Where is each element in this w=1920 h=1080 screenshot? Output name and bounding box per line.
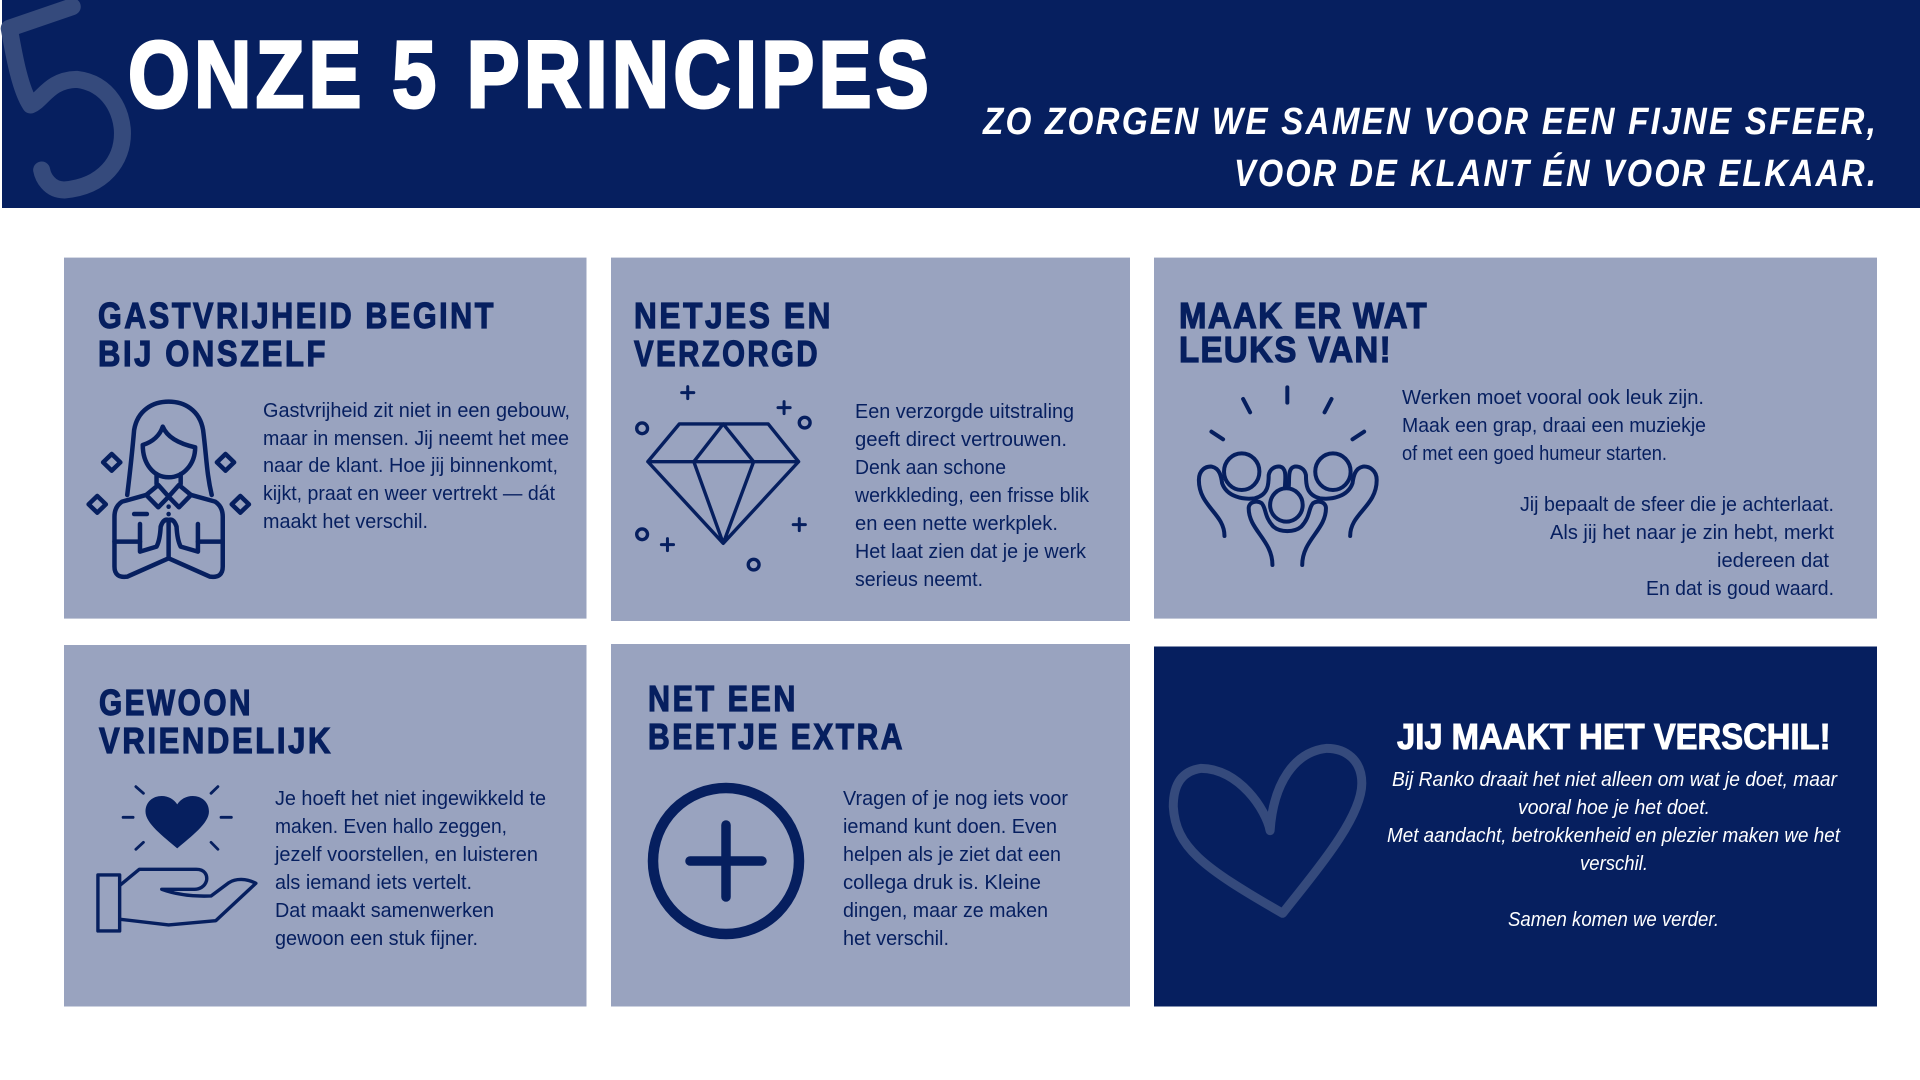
body text: right aligned: Als jij het naar je zin hebt, merkt [1550,521,1834,544]
heading: gastvrijheid [98,295,496,374]
heading: extra [648,678,905,757]
heading: netjes [634,295,833,374]
heading: extra: NET EEN [648,678,798,719]
body text: iemand kunt doen. Even [843,815,1057,838]
body text: right aligned [1520,493,1834,600]
body text: Je hoeft het niet ingewikkeld te [275,787,546,810]
body text: intro: of met een goed humeur starten. [1402,442,1667,465]
panel: gastvrijheid begint bij onszelf [64,258,586,619]
heading: extra: BEETJE EXTRA [648,716,905,757]
heading: leuks: MAAK ER WAT [1179,295,1428,336]
body text: jezelf voorstellen, en luisteren [274,843,538,866]
body text: als iemand iets vertelt. [275,871,472,894]
body text: en een nette werkplek. [855,512,1058,535]
body text: maar in mensen. Jij neemt het mee [263,427,569,450]
heading: verschil: JIJ MAAKT HET VERSCHIL! [1397,716,1830,757]
body text: naar de klant. Hoe jij binnenkomt, [263,454,558,477]
panel: netjes en verzorgd [611,258,1130,621]
body text: werkkleding, een frisse blik [854,484,1090,507]
heading: vriendelijk: GEWOON [99,682,253,723]
body text: intro: Werken moet vooral ook leuk zijn. [1402,386,1704,409]
body text: kijkt, praat en weer vertrekt — dát [263,482,555,505]
heading: gastvrijheid: BIJ ONSZELF [98,333,328,374]
body text: right aligned: En dat is goud waard. [1646,577,1834,600]
body text: serieus neemt. [855,568,983,591]
body text: Het laat zien dat je je werk [855,540,1087,563]
body text: dingen, maar ze maken [843,899,1048,922]
heading: leuks: LEUKS VAN! [1179,329,1392,370]
body text: Vragen of je nog iets voor [843,787,1068,810]
panel: jij maakt het verschil [1154,646,1877,1006]
body text: intro: Maak een grap, draai een muziekje [1402,414,1706,437]
body text: gewoon een stuk fijner. [275,927,478,950]
body text [274,787,546,950]
heading: leuks [1179,295,1428,370]
heading: netjes: NETJES EN [634,295,833,336]
heading: gastvrijheid: GASTVRIJHEID BEGINT [98,295,496,336]
body text [263,399,570,533]
decorative large number 5 [9,7,122,190]
icon: cheering people [1199,387,1377,565]
heading: vriendelijk [99,682,333,761]
body text: right aligned: iedereen dat [1717,549,1829,572]
icon: hand holding heart [98,787,256,931]
body text [854,400,1090,591]
closing text: Bij Ranko draait het niet alleen om wat je doet, maar [1392,768,1838,791]
icon: diamond [637,387,810,570]
body text [843,787,1068,950]
body text: right aligned: Jij bepaalt de sfeer die je achterlaat. [1520,493,1834,516]
body text: Dat maakt samenwerken [275,899,494,922]
body text: helpen als je ziet dat een [843,843,1061,866]
panel: maak er wat leuks van [1154,258,1877,619]
panel: gewoon vriendelijk [64,645,586,1006]
body text: maken. Even hallo zeggen, [275,815,507,838]
heading: vriendelijk: VRIENDELIJK [99,720,333,761]
body text: collega druk is. Kleine [843,871,1041,894]
closing text: Samen komen we verder. [1508,908,1719,931]
heading: netjes: VERZORGD [634,333,820,374]
body text: het verschil. [843,927,949,950]
title: ONZE 5 PRINCIPES [128,22,933,128]
body text: Denk aan schone [855,456,1006,479]
body text: Een verzorgde uitstraling [855,400,1074,423]
panel: net een beetje extra [611,644,1130,1006]
body text: geeft direct vertrouwen. [855,428,1067,451]
subtitle [982,101,1878,195]
closing text: vooral hoe je het doet. [1518,796,1710,819]
icon: woman with folded hands [89,402,249,577]
header banner [2,0,1920,208]
closing text [1387,768,1841,931]
body text: intro [1402,386,1706,465]
body text: Gastvrijheid zit niet in een gebouw, [263,399,570,422]
closing text: verschil. [1580,852,1648,875]
icon: plus in circle [653,788,799,934]
body text: maakt het verschil. [263,510,428,533]
closing text: Met aandacht, betrokkenheid en plezier maken we het [1387,824,1841,847]
icon: outlined heart [1173,748,1362,913]
